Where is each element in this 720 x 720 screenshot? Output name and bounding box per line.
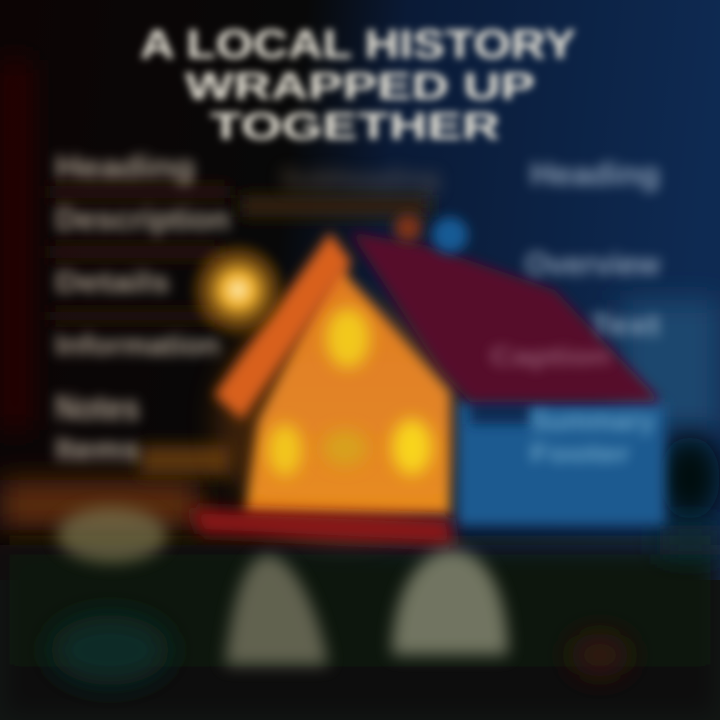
- house orange wall: [245, 262, 450, 515]
- text block: left column: Notes: [55, 387, 140, 428]
- text block: right column: Heading: [530, 156, 660, 192]
- text block: right column: [490, 156, 660, 468]
- house orange roof: [214, 232, 352, 420]
- text block: right column: Footer: [530, 438, 630, 468]
- dark eave: [470, 398, 530, 424]
- blue orb: [432, 217, 468, 253]
- light: lamp: [188, 240, 288, 340]
- text block: right column: Caption: [490, 341, 610, 371]
- title: A LOCAL HISTORY: [140, 21, 576, 67]
- house glow: [215, 300, 465, 540]
- text block: right column: Text: [590, 309, 660, 342]
- text block: right column: Overview: [525, 246, 660, 282]
- title: TOGETHER: [210, 106, 500, 148]
- text block: left column: Items: [55, 431, 140, 467]
- window: left: [268, 424, 302, 476]
- ground: [0, 436, 720, 720]
- icon: stone left: [57, 507, 167, 563]
- icon: stone centre: [225, 555, 328, 665]
- text block: upper centre: Subheading: [280, 163, 440, 194]
- text block: left column: Description: [55, 201, 230, 237]
- title: [140, 21, 576, 148]
- window: centre: [323, 430, 367, 466]
- house red base: [190, 508, 455, 546]
- text block: right column: Summary: [530, 405, 655, 436]
- title: WRAPPED UP: [185, 66, 535, 108]
- window: top: [326, 308, 370, 368]
- text block: left column: Details: [55, 266, 170, 299]
- house blue wall: [458, 402, 665, 525]
- illustration: house: [188, 214, 665, 546]
- icon: stone right: [392, 550, 508, 655]
- text block: left column: Information: [55, 329, 220, 362]
- text block: left column: [55, 149, 230, 467]
- red orb: [394, 214, 422, 242]
- house maroon roof: [350, 232, 662, 402]
- text block: left column: Heading: [55, 149, 195, 185]
- window: right: [392, 419, 432, 475]
